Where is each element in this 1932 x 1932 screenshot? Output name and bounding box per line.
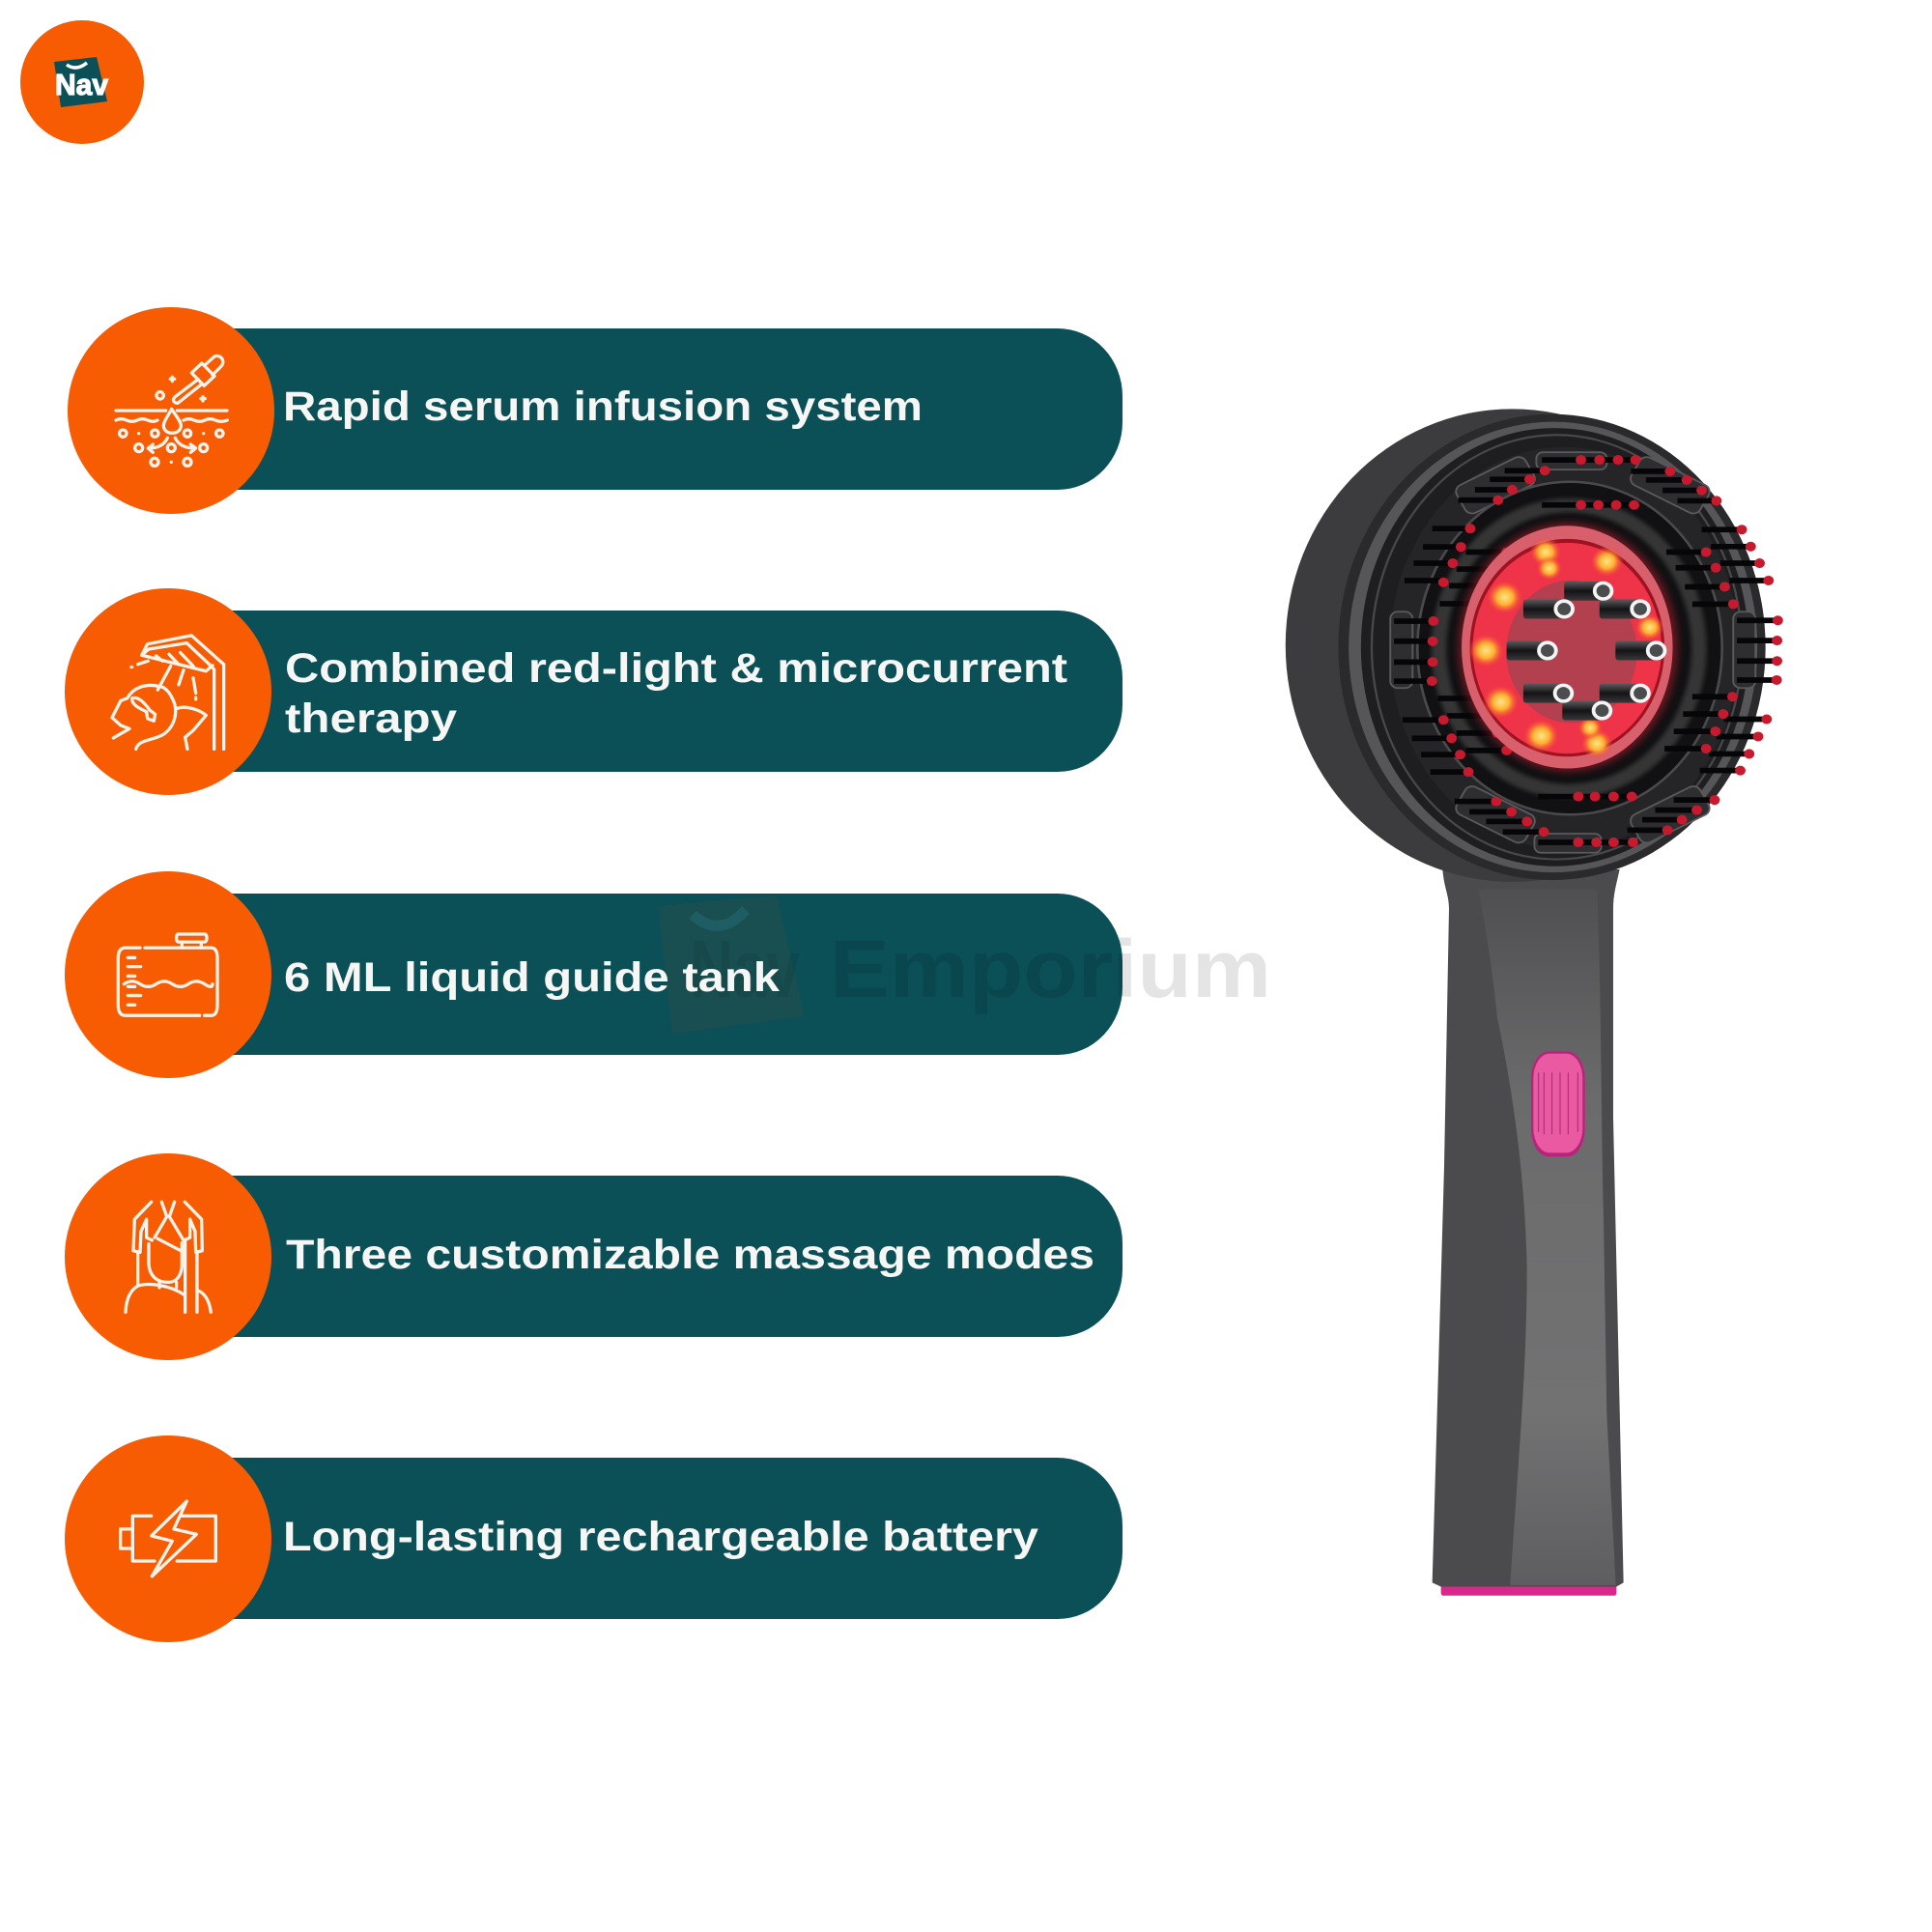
feature text 5: Long-lasting rechargeable battery	[283, 1514, 1038, 1560]
watermark	[658, 895, 1271, 1034]
feature text 2 second line: therapy	[285, 696, 457, 742]
red bristle tips	[1432, 460, 1777, 842]
icon circle 1: serum dropper	[68, 307, 274, 514]
feature bar 1	[164, 328, 1122, 490]
icon circle 2: red light head therapy	[65, 588, 271, 795]
bristle pads	[1390, 452, 1755, 853]
watermark: Emporium	[830, 923, 1271, 1014]
icon circle 3: liquid tank	[65, 871, 271, 1078]
feature text 3: 6 ML liquid guide tank	[284, 954, 780, 1001]
icon circle 4: scalp massage	[65, 1153, 271, 1360]
logo badge: Nav	[55, 68, 109, 101]
black bristles	[1394, 460, 1777, 842]
feature text 4: Three customizable massage modes	[286, 1232, 1094, 1278]
red light disk	[1458, 523, 1678, 772]
device head	[1286, 409, 1777, 882]
feature bar 5	[164, 1458, 1122, 1619]
feature bar 3	[164, 894, 1122, 1055]
feature bar 4	[164, 1176, 1122, 1337]
logo badge	[20, 20, 144, 144]
product: device	[1286, 409, 1777, 1596]
feature text 2: Combined red-light & microcurrent	[285, 645, 1067, 692]
watermark: Nav	[690, 923, 800, 1014]
icon circle 5: battery	[65, 1435, 271, 1642]
feature text 1: Rapid serum infusion system	[283, 384, 923, 430]
feature bar 2	[164, 611, 1122, 772]
device handle	[1433, 869, 1624, 1596]
power button	[1531, 1051, 1585, 1156]
metal pins	[1507, 582, 1664, 721]
